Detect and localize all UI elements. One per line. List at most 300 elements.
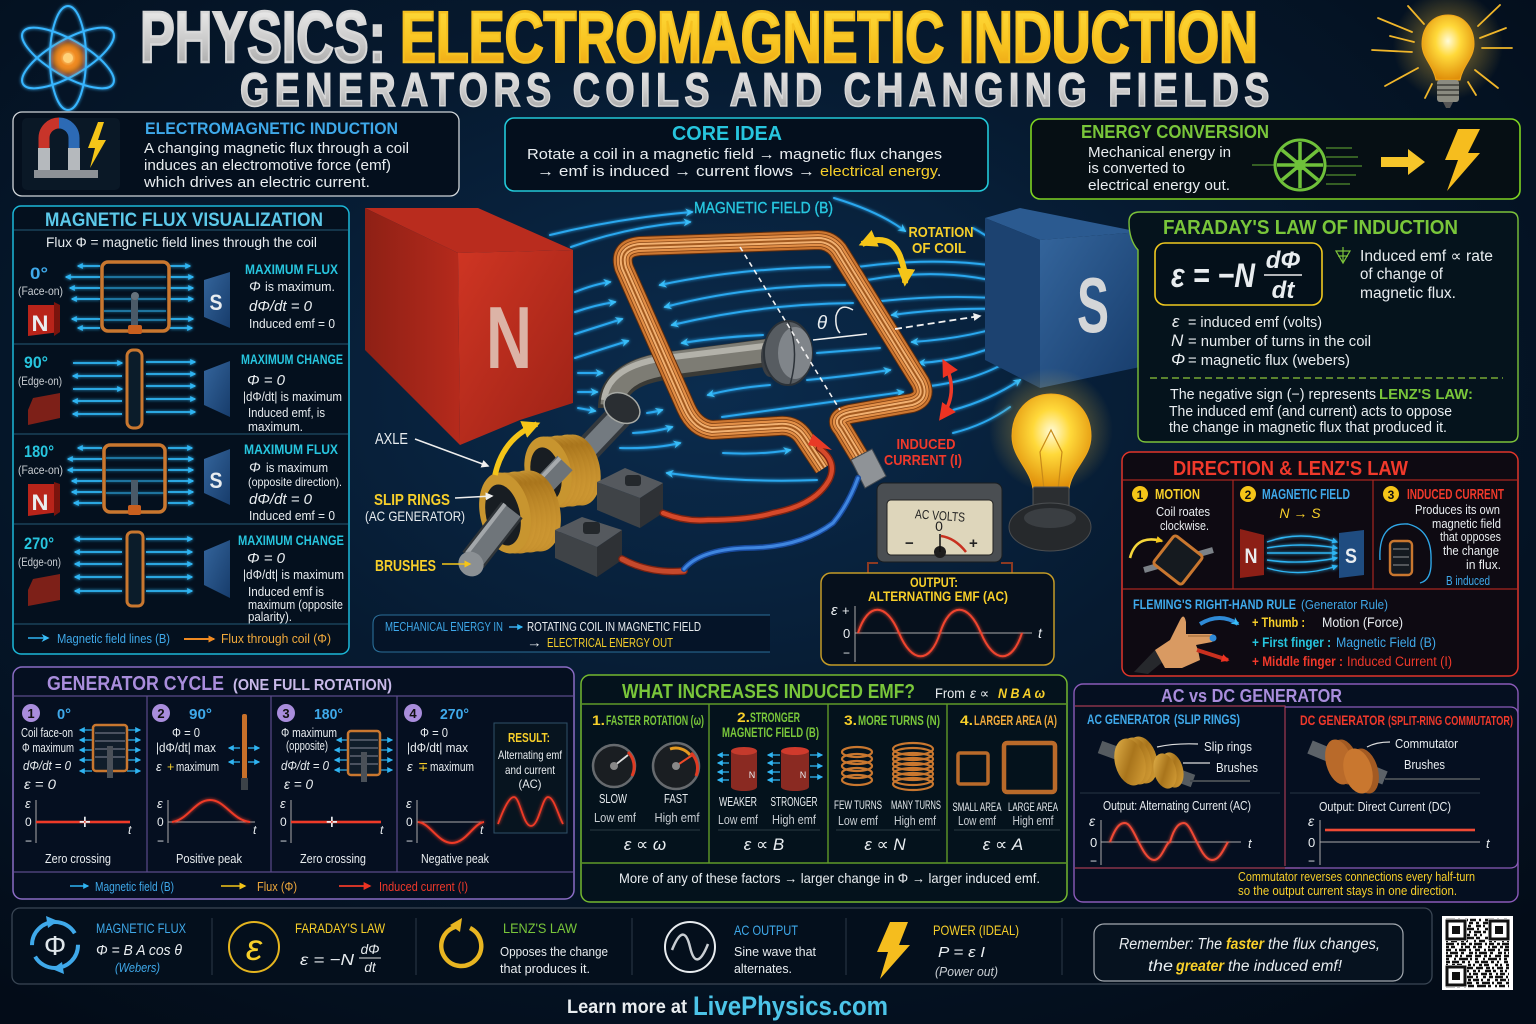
equation: ε = −N — [1171, 257, 1256, 295]
icon: lightning bolt — [1445, 129, 1480, 191]
item: faraday's law: dΦ — [361, 942, 379, 957]
text block: lenz note: the change in magnetic flux that produced it. — [1169, 420, 1447, 436]
result box: (AC) — [518, 777, 542, 791]
icon: right hand — [1134, 616, 1238, 674]
column: motion: MOTION — [1155, 486, 1200, 503]
row: 180 degrees: N — [32, 490, 48, 515]
item: power: (Power out) — [935, 965, 998, 979]
legend: Magnetic field lines (B) — [57, 631, 170, 646]
label: axle — [375, 431, 488, 466]
illustration: AC voltmeter — [868, 483, 1012, 573]
row: 180 degrees: 180° — [24, 442, 54, 461]
column: dc generator: 0 — [1308, 835, 1315, 850]
item: ac output — [665, 922, 816, 976]
column: dc generator: − — [1308, 854, 1315, 868]
factor 4: Low emf — [958, 813, 996, 828]
column: induced current: Produces its own — [1415, 503, 1500, 517]
legend: Flux through coil (Φ) — [221, 631, 331, 646]
fleming's rule: Induced Current (I) — [1347, 654, 1452, 669]
row: 270 degrees: |dΦ/dt| is maximum — [243, 568, 344, 582]
label: brushes: BRUSHES — [375, 558, 436, 575]
callout: output alternating emf: 0 — [843, 626, 850, 641]
label: induced current: INDUCED — [896, 436, 956, 453]
equation: dΦ — [1266, 247, 1300, 274]
step 1: 0° — [57, 706, 71, 723]
row: 180 degrees: dΦ/dt = 0 — [249, 491, 313, 508]
column: induced current: magnetic field — [1432, 517, 1501, 531]
column: ac generator: (SLIP RINGS) — [1174, 711, 1240, 727]
row: 180 degrees: (opposite direction). — [248, 475, 342, 489]
row: 180 degrees: is maximum — [266, 461, 328, 475]
step 1: Coil face-on — [21, 726, 73, 740]
heading: GENERATOR CYCLE — [47, 673, 224, 695]
callout: remember: the induced emf! — [1228, 958, 1343, 975]
arrow: induced current — [941, 362, 951, 418]
panel: what increases induced emf — [581, 675, 1067, 902]
fleming's rule: + Middle finger : — [1252, 654, 1343, 669]
row: 90 degrees: maximum. — [248, 419, 303, 434]
footer link — [567, 991, 888, 1021]
column: dc generator — [1300, 712, 1513, 868]
item: faraday's law: ε — [246, 927, 263, 968]
callout: remember: Remember: The — [1119, 936, 1222, 953]
row: 180 degrees: Induced emf = 0 — [249, 508, 335, 523]
column: motion: clockwise. — [1160, 519, 1209, 533]
factor 2: N — [749, 770, 755, 780]
factor 1: 1. — [592, 712, 605, 728]
column: dc generator: Brushes — [1404, 757, 1445, 772]
result box: and current — [505, 763, 556, 777]
front ring — [472, 466, 568, 558]
title: PHYSICS: — [140, 0, 386, 78]
item: magnetic flux: Φ = B A cos θ — [96, 942, 182, 959]
text block: which drives an electric current. — [143, 175, 370, 191]
step 1: t — [128, 823, 132, 837]
step 4: 270° — [440, 706, 469, 723]
heading: MAGNETIC FLUX VISUALIZATION — [45, 210, 323, 231]
column: ac generator: − — [1090, 854, 1097, 868]
factor 2: STRONGER — [750, 709, 800, 725]
label: slip rings: SLIP RINGS — [374, 492, 450, 509]
panel: core idea — [505, 118, 988, 191]
step 2: 2 — [157, 706, 165, 721]
row: 0 degrees: (Face-on) — [18, 284, 63, 298]
factor 4: LARGE AREA — [1008, 800, 1058, 814]
icon: turbine — [1252, 140, 1362, 190]
column: dc generator: ε — [1308, 813, 1315, 829]
factor 3: ε ∝ N — [864, 835, 906, 854]
text block: proportional — [1360, 248, 1493, 302]
row: 90 degrees: (Edge-on) — [18, 374, 62, 388]
illustration: rotation axes: θ — [817, 313, 828, 334]
factor 2: High emf — [772, 812, 816, 827]
row: 270 degrees: 270° — [24, 534, 54, 553]
text block: is converted to — [1088, 161, 1185, 177]
panel: energy conversion — [1031, 119, 1520, 199]
item: power: P = ε I — [938, 944, 985, 961]
step 4: maximum — [430, 760, 474, 774]
formula: ε ∝ — [970, 686, 989, 701]
column: ac generator: Brushes — [1216, 760, 1258, 775]
panel: electromagnetic induction — [13, 112, 459, 196]
step 1: ε = 0 — [24, 776, 56, 792]
factor 1: FASTER ROTATION (ω) — [606, 712, 704, 728]
column: induced current: the change — [1443, 544, 1499, 558]
step 4: t — [480, 823, 484, 837]
formula: N B A ω — [998, 686, 1045, 701]
factor 4: High emf — [1012, 813, 1054, 828]
step 1: 0 — [25, 815, 32, 829]
factor 3 — [834, 712, 941, 854]
step 3: 3 — [282, 706, 290, 721]
illustration: axle — [585, 321, 812, 452]
row: 180 degrees — [18, 441, 342, 523]
text block: lenz note: LENZ'S LAW: — [1379, 387, 1473, 403]
text block: Mechanical energy in — [1088, 145, 1231, 161]
equation: dt — [1272, 277, 1295, 304]
illustration: glowing bulb — [989, 368, 1113, 551]
callout: remember: the flux changes, — [1268, 936, 1380, 953]
text block: induces an electromotive force (emf) — [144, 158, 391, 174]
item: faraday's law: FARADAY'S LAW — [295, 920, 386, 936]
text block: → emf is induced → current flows → — [537, 163, 815, 180]
step 2: + — [167, 760, 174, 774]
chart: sine — [855, 606, 1032, 662]
text block: definitions — [1171, 312, 1371, 369]
factor 1: ε ∝ ω — [624, 835, 666, 854]
result box: Alternating emf — [498, 748, 563, 762]
step 3 — [277, 704, 392, 866]
label: rotation of coil: ROTATION — [908, 224, 974, 241]
text block: lenz note — [1169, 387, 1473, 436]
text block: Rotate a coil in a magnetic field → magnetic flux changes — [527, 146, 942, 163]
step 4: ε — [406, 796, 412, 811]
fleming's rule: Magnetic Field (B) — [1336, 635, 1436, 650]
step 4: 0 — [406, 815, 413, 829]
factor 2 — [718, 709, 822, 854]
illustration: AC voltmeter: 0 — [935, 518, 943, 534]
footer link: LivePhysics.com — [693, 991, 888, 1021]
legend: Magnetic field (B) — [95, 880, 174, 894]
step 3: Zero crossing — [300, 852, 366, 866]
row: 90 degrees: 90° — [24, 353, 48, 372]
step 4: Φ = 0 — [420, 726, 448, 740]
label: slip rings: (AC GENERATOR) — [365, 508, 465, 524]
text block — [1088, 145, 1231, 194]
qr code — [1442, 916, 1513, 990]
text block: electrical energy — [820, 163, 939, 180]
illustration: wires — [622, 434, 858, 572]
text block: definitions: N — [1171, 331, 1184, 350]
step 3: ε = 0 — [284, 776, 313, 792]
step 4 — [404, 704, 490, 866]
step 2: − — [157, 834, 164, 848]
column: induced current: in flux. — [1466, 558, 1501, 572]
illustration: south magnet — [985, 208, 1140, 388]
item: faraday's law — [229, 920, 386, 975]
column: induced current: B induced — [1446, 574, 1490, 588]
label: magnetic field: MAGNETIC FIELD (B) — [694, 200, 833, 217]
item: lenz's law: that produces it. — [500, 961, 590, 976]
row: 0 degrees: S — [210, 290, 222, 315]
legend — [70, 880, 468, 894]
factor 3: High emf — [894, 813, 936, 828]
heading: WHAT INCREASES INDUCED EMF? — [622, 681, 915, 703]
row: 270 degrees: MAXIMUM CHANGE — [238, 532, 344, 548]
step 4: ε — [407, 759, 413, 774]
column: dc generator: DC GENERATOR — [1300, 712, 1385, 728]
item: magnetic flux: (Webers) — [115, 961, 160, 975]
text block: . — [937, 163, 941, 180]
factor 3: MANY TURNS — [891, 798, 941, 812]
factor 1: SLOW — [599, 791, 628, 806]
callout: output alternating emf: OUTPUT: — [910, 575, 958, 590]
column: ac generator — [1087, 711, 1258, 868]
panel: generator cycle — [13, 667, 574, 899]
icon: atom — [14, 6, 122, 110]
legend — [28, 631, 331, 646]
icon: triangle — [1336, 247, 1350, 263]
step 1: ✛ — [79, 814, 91, 830]
column: ac generator: 0 — [1090, 835, 1097, 850]
factor 2: ε ∝ B — [744, 835, 784, 854]
illustration: AC voltmeter: AC VOLTS — [915, 506, 966, 525]
step 1: Φ maximum — [22, 741, 74, 755]
legend: Induced current (I) — [379, 880, 468, 894]
factor 4: ε ∝ A — [983, 835, 1023, 854]
text block — [527, 146, 942, 180]
brush block 1 — [597, 468, 663, 528]
factor 3: Low emf — [838, 813, 878, 828]
illustration: north magnet: N — [486, 288, 532, 387]
text block: proportional: Induced emf ∝ rate — [1360, 248, 1493, 265]
factor 2: Low emf — [718, 812, 758, 827]
item: lenz's law — [441, 918, 608, 976]
label: rotation of coil: OF COIL — [912, 240, 966, 257]
step 4: − — [406, 834, 413, 848]
factor 1 — [592, 712, 704, 854]
column: magnetic field — [1240, 486, 1364, 578]
item: magnetic flux: Φ — [44, 930, 66, 961]
row: 180 degrees: S — [210, 468, 222, 493]
fleming's rule: + First finger : — [1252, 635, 1331, 650]
column: magnetic field: 2 — [1245, 488, 1252, 502]
item: power: POWER (IDEAL) — [933, 922, 1019, 938]
fleming's rule: + Thumb : — [1252, 615, 1305, 630]
row: 0 degrees: dΦ/dt = 0 — [249, 298, 313, 315]
panel: ac vs dc generator — [1074, 684, 1518, 902]
note: so the output current stays in one direction. — [1238, 884, 1457, 898]
fleming's rule — [1133, 596, 1452, 674]
note: Commutator reverses connections every half-turn — [1238, 870, 1475, 884]
column: magnetic field: N — [1244, 545, 1258, 568]
row: 0 degrees: 0° — [30, 264, 48, 283]
callout: energy flow: ELECTRICAL ENERGY OUT — [547, 635, 673, 650]
arrow: axle rotation — [495, 424, 537, 475]
column: motion: Coil roates — [1156, 505, 1210, 519]
text block: electrical energy out. — [1088, 178, 1230, 194]
heading: ENERGY CONVERSION — [1081, 122, 1269, 142]
text block: definitions: = magnetic flux (webers) — [1188, 352, 1350, 369]
factor 2: 2. — [737, 709, 750, 725]
label: induced current: CURRENT (I) — [884, 452, 962, 469]
step 3: (opposite) — [286, 739, 328, 753]
column: magnetic field: S — [1345, 545, 1357, 568]
step 2: 0 — [157, 815, 164, 829]
step 2 — [152, 704, 259, 866]
callout: energy flow: → — [527, 635, 542, 650]
column: induced current: that opposes — [1440, 530, 1501, 544]
step 1: ε — [25, 796, 31, 811]
row: 90 degrees: MAXIMUM CHANGE — [241, 351, 343, 367]
column: motion: 1 — [1137, 488, 1144, 502]
illustration: north magnet — [365, 208, 573, 445]
step 2: maximum — [176, 760, 219, 774]
illustration: magnetic field lines — [550, 198, 1023, 481]
step 4: |dΦ/dt| max — [407, 741, 469, 755]
text block: definitions: ε — [1172, 312, 1180, 331]
callout: remember: faster — [1226, 936, 1265, 953]
note — [1238, 870, 1475, 898]
factor 1: High emf — [654, 810, 700, 825]
illustration: slip rings and brushes — [453, 430, 663, 581]
illustration: rotation axes — [740, 247, 980, 410]
fleming's rule: FLEMING'S RIGHT-HAND RULE — [1133, 596, 1296, 612]
row: 0 degrees: N — [32, 311, 48, 336]
callout: energy flow: ROTATING COIL IN MAGNETIC FIELD — [527, 619, 701, 634]
step 3: dΦ/dt = 0 — [281, 759, 329, 773]
item: ac output: Sine wave that — [734, 944, 816, 959]
row: 0 degrees: Induced emf = 0 — [249, 316, 335, 331]
item: magnetic flux — [32, 916, 187, 975]
row: 270 degrees: Φ = 0 — [247, 550, 286, 567]
step 2: ε — [157, 796, 163, 811]
row: 270 degrees: Induced emf is — [248, 585, 324, 599]
step 3: 180° — [314, 706, 343, 723]
factor 2: N — [800, 770, 806, 780]
callout: output alternating emf — [821, 573, 1054, 665]
text block — [143, 141, 409, 191]
item: ac output: AC OUTPUT — [734, 922, 798, 938]
callout: output alternating emf: ε — [831, 602, 838, 619]
step 4: 4 — [409, 706, 417, 721]
factor 4: SMALL AREA — [952, 800, 1002, 814]
step 1: Zero crossing — [45, 852, 111, 866]
summary: More of any of these factors → larger change in Φ → larger induced emf. — [619, 870, 1040, 886]
callout: remember: greater — [1175, 958, 1225, 975]
step 2: Φ = 0 — [172, 726, 200, 740]
row: 180 degrees: (Face-on) — [18, 463, 63, 477]
result box: RESULT: — [508, 730, 550, 745]
label: slip rings — [365, 492, 492, 524]
formula: From — [935, 686, 965, 701]
step 4: Negative peak — [421, 852, 490, 866]
step 2: Positive peak — [176, 852, 243, 866]
fleming's rule: (Generator Rule) — [1301, 597, 1388, 612]
brush block 2 — [555, 517, 622, 577]
step 4: ∓ — [418, 760, 428, 774]
panel: generator cycle: (ONE FULL ROTATION) — [233, 677, 392, 694]
text block: definitions: = induced emf (volts) — [1188, 314, 1322, 331]
arrow: rotation of coil — [862, 240, 905, 283]
title: GENERATORS COILS AND CHANGING FIELDS — [240, 63, 1275, 116]
summary strip — [12, 908, 1432, 984]
text block: proportional: of change of — [1360, 266, 1444, 283]
heading: AC vs DC GENERATOR — [1161, 686, 1342, 706]
item: ac output: alternates. — [734, 961, 792, 976]
row: 90 degrees: Induced emf, is — [248, 405, 325, 420]
illustration: AC voltmeter: − — [905, 535, 914, 552]
heading: DIRECTION & LENZ'S LAW — [1173, 458, 1408, 480]
column: ac generator: Output: Alternating Current (AC) — [1103, 798, 1251, 813]
row: 90 degrees: |dΦ/dt| is maximum — [243, 390, 342, 404]
title — [140, 0, 1275, 116]
column: ac generator: AC GENERATOR — [1087, 711, 1170, 727]
item: lenz's law: LENZ'S LAW — [503, 920, 578, 936]
callout: energy flow — [373, 615, 770, 652]
column: ac generator: t — [1248, 836, 1253, 851]
column: induced current — [1380, 486, 1504, 588]
column: ac generator: ε — [1089, 813, 1096, 829]
label: axle: AXLE — [375, 431, 408, 448]
column: dc generator: Output: Direct Current (DC) — [1319, 799, 1451, 814]
step 1: − — [25, 834, 32, 848]
step 3: − — [280, 834, 287, 848]
factor 3: 3. — [844, 712, 857, 728]
item: magnetic flux: MAGNETIC FLUX — [96, 920, 187, 936]
row: 90 degrees: Φ = 0 — [247, 372, 286, 389]
step 3: ✛ — [326, 814, 338, 830]
row: 270 degrees: maximum (opposite — [248, 598, 343, 612]
text block: proportional: magnetic flux. — [1360, 285, 1456, 302]
panel: faraday's law — [1129, 212, 1518, 442]
text block: A changing magnetic flux through a coil — [144, 141, 409, 157]
step 2: ε — [156, 759, 162, 774]
step 1 — [21, 704, 140, 866]
callout: remember: the — [1148, 958, 1173, 975]
icon: light bulb top right — [1372, 0, 1512, 108]
factor 1: Low emf — [594, 810, 636, 825]
factor 2: MAGNETIC FIELD (B) — [722, 724, 819, 740]
factor 4: 4. — [960, 712, 973, 728]
column: dc generator: Commutator — [1395, 736, 1459, 751]
factor 3: FEW TURNS — [834, 798, 882, 812]
factor 2: WEAKER — [719, 795, 757, 809]
column: induced current: 3 — [1388, 488, 1395, 502]
heading: CORE IDEA — [672, 123, 782, 145]
step 2: |dΦ/dt| max — [156, 741, 217, 755]
label: rotation of coil — [908, 224, 974, 257]
callout: output alternating emf: − — [843, 646, 850, 660]
panel: magnetic flux visualization — [13, 206, 349, 654]
item: power — [877, 922, 1019, 979]
legend: Flux (Φ) — [257, 880, 297, 894]
item: lenz's law: Opposes the change — [500, 944, 608, 959]
step 3: Φ maximum — [281, 726, 337, 740]
row: 0 degrees — [18, 261, 339, 336]
item: faraday's law: ε = −N — [300, 952, 355, 969]
column: motion — [1130, 486, 1213, 585]
column: ac generator: Slip rings — [1204, 739, 1252, 754]
subtitle: Flux Φ = magnetic field lines through the coil — [46, 234, 317, 250]
factor 2: STRONGER — [770, 795, 818, 809]
step 1: 1 — [27, 706, 35, 721]
row: 270 degrees: palarity). — [248, 610, 292, 624]
row: 0 degrees: MAXIMUM FLUX — [245, 261, 339, 277]
formula — [935, 686, 1045, 701]
illustration: south magnet: S — [1077, 261, 1109, 349]
callout: output alternating emf: + — [842, 603, 850, 618]
